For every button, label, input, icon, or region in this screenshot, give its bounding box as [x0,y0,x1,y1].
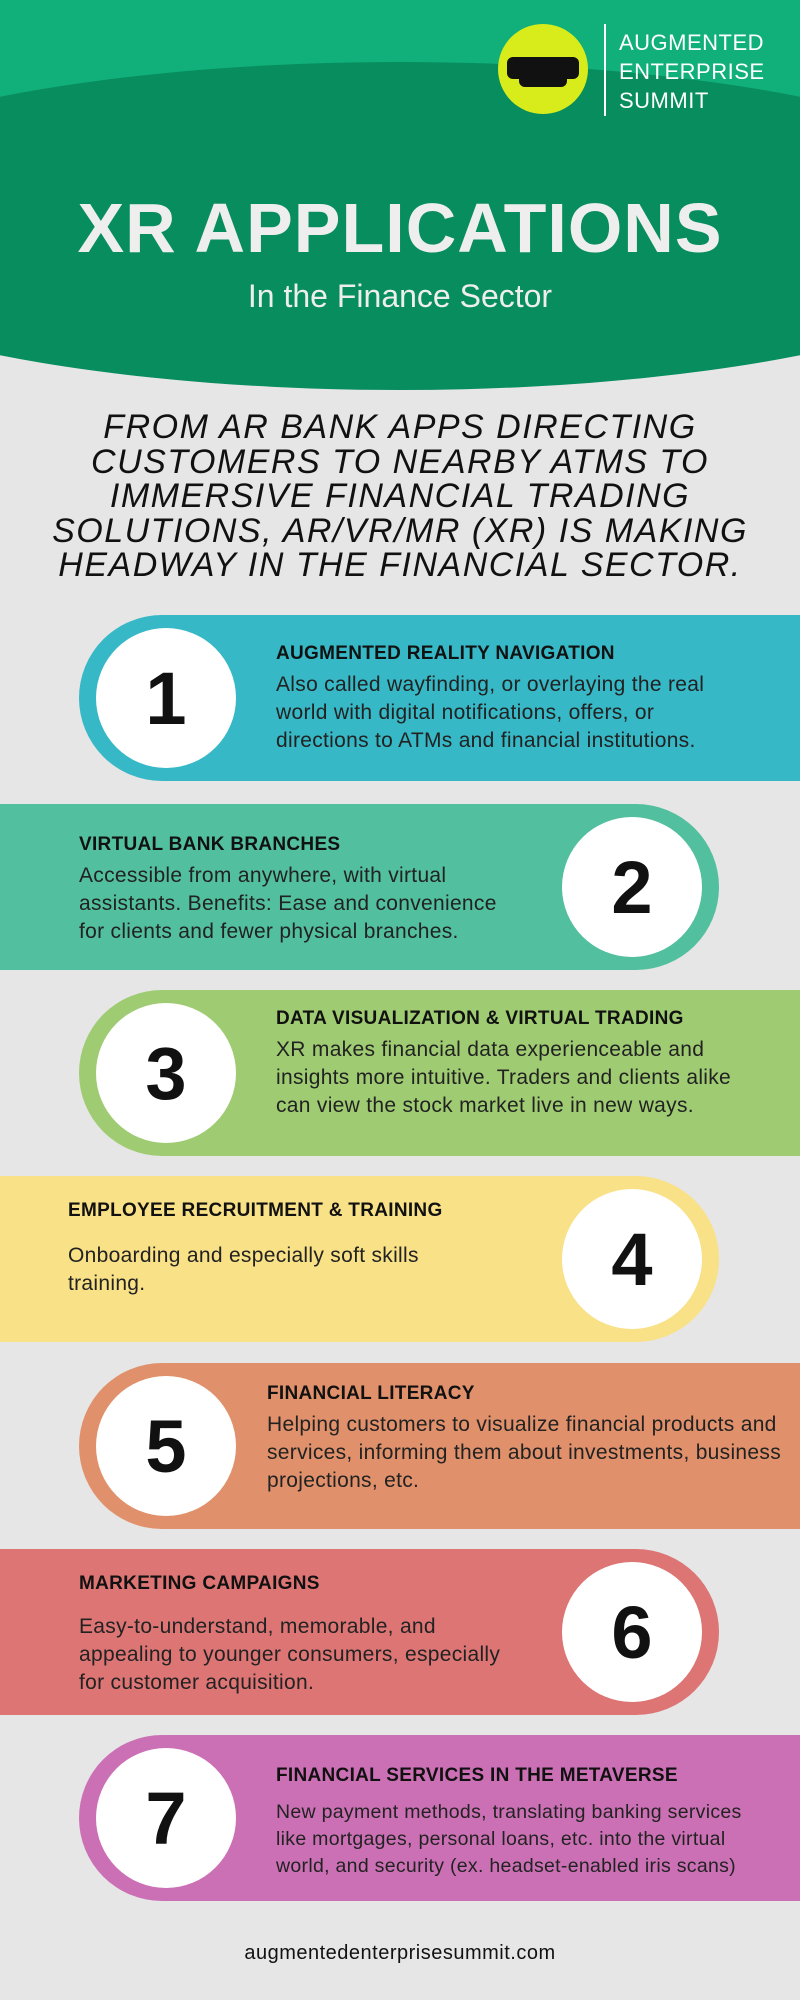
panel 1: 1 [145,656,187,740]
panel 5: Helping customers to visualize financial products and services, informing them about investments, business projections, etc. [267,1413,781,1492]
panel 2: 2 [611,846,653,928]
panel 6: 6 [611,1590,653,1674]
panel 7: FINANCIAL SERVICES IN THE METAVERSE [276,1765,678,1786]
logo [498,24,765,116]
logo text: ENTERPRISE [619,59,765,84]
panel 7: 7 [145,1776,187,1860]
panel 5: FINANCIAL LITERACY [267,1383,475,1404]
panel 1: Also called wayfinding, or overlaying the real world with digital notifications, offers, or directions to ATMs and financial institutions. [276,673,704,752]
panel 6 [0,1549,719,1715]
subtitle: In the Finance Sector [248,278,552,314]
panel 4: Onboarding and especially soft skills training. [68,1244,419,1295]
logo text: SUMMIT [619,88,709,113]
title: XR APPLICATIONS [77,189,723,267]
logo text: AUGMENTED [619,30,764,55]
panel 6: MARKETING CAMPAIGNS [79,1573,320,1594]
panel 6: Easy-to-understand, memorable, and appealing to younger consumers, especially for customer acquisition. [79,1615,500,1694]
panel 3: 3 [145,1032,187,1114]
panel 4 [0,1176,719,1342]
panel 1: AUGMENTED REALITY NAVIGATION [276,643,615,664]
panel 7 [79,1735,800,1901]
panel 5: 5 [145,1404,187,1488]
panel 3 [79,990,800,1156]
header background [0,0,800,390]
logo text [619,30,765,113]
panel 3: XR makes financial data experienceable and insights more intuitive. Traders and clients alike can view the stock market live in new ways. [276,1038,731,1117]
panel 2: Accessible from anywhere, with virtual assistants. Benefits: Ease and convenience for clients and fewer physical branches. [79,864,497,943]
panel 3: DATA VISUALIZATION & VIRTUAL TRADING [276,1008,684,1029]
panel 2 [0,804,719,970]
icon: headset [498,24,588,114]
panel 2: VIRTUAL BANK BRANCHES [79,834,340,855]
panel 1 [79,615,800,781]
intro text: FROM AR BANK APPS DIRECTING CUSTOMERS TO NEARBY ATMS TO IMMERSIVE FINANCIAL TRADING SOLUTIONS, AR/VR/MR (XR) IS MAKING HEADWAY IN THE FINANCIAL SECTOR. [52,408,748,584]
footer: augmentedenterprisesummit.com [244,1942,556,1964]
panel 4: EMPLOYEE RECRUITMENT & TRAINING [68,1200,443,1221]
panel 4: 4 [611,1218,653,1300]
panel 5 [79,1363,800,1529]
panel 7: New payment methods, translating banking services like mortgages, personal loans, etc. into the virtual world, and security (ex. headset-enabled iris scans) [276,1801,742,1877]
